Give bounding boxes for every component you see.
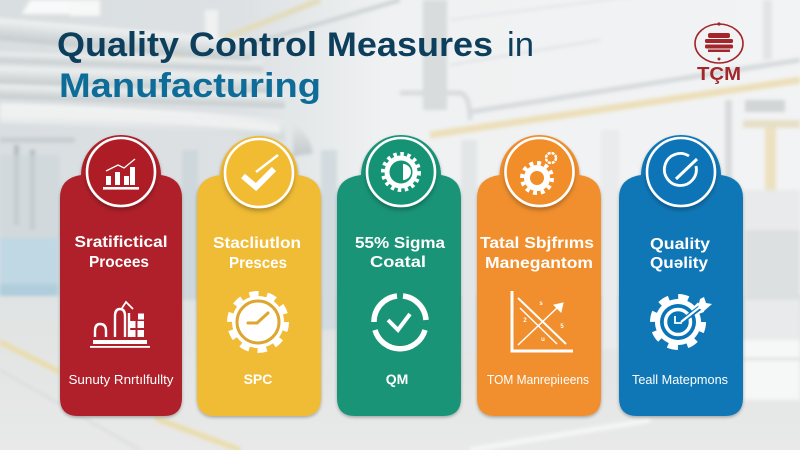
panel: total systems management (477, 135, 601, 416)
icon: bar chart with arrow (90, 302, 150, 348)
title: Manufacturing (59, 67, 321, 105)
card shape red (60, 135, 182, 416)
heading: Sratifictical (74, 234, 168, 251)
icon: cross chart with arrow: 2 (523, 318, 527, 324)
caption: Teall Matepmons (632, 373, 728, 387)
badge icon: gears in circle (506, 138, 574, 206)
panel: quality (619, 135, 743, 416)
icon: cross chart with arrow: u (541, 337, 545, 343)
icon: cross chart with arrow (512, 291, 573, 351)
heading: Stacliutlon (213, 235, 301, 252)
panel: total systems management: Manegantom (485, 255, 593, 272)
logo: TCM: TÇM (697, 64, 741, 84)
icon: gear with target and arrow (654, 297, 712, 346)
badge icon: target dial in circle (647, 138, 715, 206)
caption: TOM Manrepiıeens (487, 373, 589, 387)
logo: TCM (695, 22, 743, 84)
badge icon: chart in circle (87, 138, 155, 206)
panel: statistical process: Procees (89, 254, 149, 271)
card shape green (337, 135, 461, 416)
card shape blue (619, 135, 743, 416)
title: in (507, 26, 534, 64)
title: Quality Control Measures (57, 26, 493, 64)
caption: QM (386, 371, 408, 387)
heading: Quality (650, 236, 710, 253)
panel: statistical process (60, 135, 182, 416)
heading: 55% Sigma (355, 235, 445, 252)
icon: gear with clock (230, 294, 286, 350)
caption: SPC (244, 371, 272, 387)
panel: quality: Quəlity (650, 255, 708, 272)
icon: cross chart with arrow: s (539, 301, 543, 307)
card shape yellow (197, 136, 321, 416)
heading: Tatal Sbjfrıms (480, 235, 594, 252)
icon: circular check (374, 296, 426, 349)
badge icon: check in circle (225, 139, 293, 207)
badge icon: gear in circle (367, 138, 435, 206)
icon: cross chart with arrow: 5 (560, 324, 564, 330)
panel: stacliution presces (197, 136, 321, 416)
panel: stacliution presces: Presces (229, 255, 287, 272)
panel: six sigma (337, 135, 461, 416)
caption: Sunuty Rnrtılfullty (68, 373, 174, 387)
card shape orange (477, 135, 601, 416)
panel: six sigma: Coatal (370, 254, 426, 271)
title (57, 26, 534, 105)
